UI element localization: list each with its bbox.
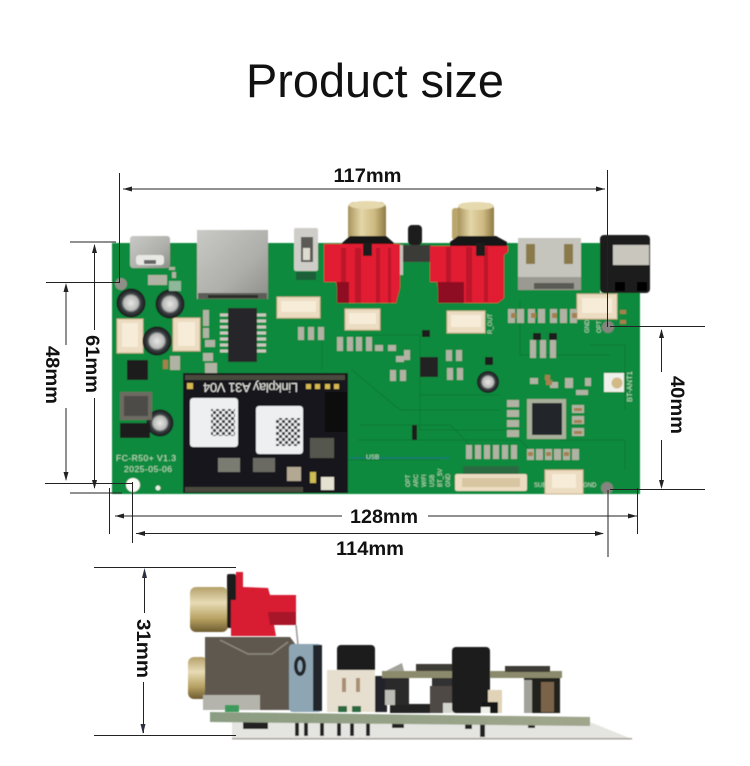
housing fold bbox=[220, 640, 288, 654]
silkscreen pin labels: GND bbox=[583, 483, 597, 489]
black capacitor 2 bbox=[452, 647, 490, 713]
silkscreen pin labels: WIFI bbox=[422, 474, 428, 487]
board traces bbox=[232, 298, 625, 470]
module header pins right bbox=[524, 678, 560, 713]
housing tab bbox=[203, 695, 260, 710]
silkscreen version text: FC-R50+ V1.3 bbox=[116, 453, 176, 463]
HDMI connector bbox=[518, 238, 581, 290]
silkscreen pin labels: USB bbox=[430, 475, 436, 487]
FPC ribbon connector bbox=[455, 466, 527, 491]
silkscreen BT-ANT1: BT-ANT1 bbox=[625, 371, 634, 402]
pins beneath board bbox=[243, 722, 535, 737]
main board edge bbox=[210, 712, 590, 726]
connector inner recesses bbox=[122, 298, 612, 488]
beige connector bbox=[488, 690, 502, 713]
green part on tab bbox=[225, 705, 239, 712]
blue capacitor bbox=[289, 644, 322, 712]
upper RCA gold barrel bbox=[190, 587, 228, 632]
module shield left bbox=[190, 398, 238, 447]
upper RCA shade bbox=[268, 612, 296, 625]
small part under module bbox=[432, 678, 452, 686]
title: Product size bbox=[246, 54, 504, 107]
dark parts beside connector bbox=[375, 676, 387, 712]
lower gold barrel bbox=[188, 657, 208, 699]
parts on module bbox=[386, 663, 550, 672]
label: 40mm: 40mm bbox=[666, 376, 687, 434]
slide switch bbox=[294, 228, 318, 280]
main processor chip bbox=[527, 399, 566, 439]
upper RCA black collar bbox=[227, 574, 236, 628]
low dark strip bbox=[390, 704, 432, 713]
label: 114mm: 114mm bbox=[336, 539, 404, 560]
module parts bbox=[218, 392, 347, 490]
white connector bbox=[327, 670, 375, 712]
silkscreen pin labels: GND bbox=[585, 319, 591, 333]
dark SMD transistors bbox=[412, 330, 557, 440]
module shield right bbox=[256, 406, 303, 454]
silkscreen pin labels bbox=[406, 313, 603, 489]
upper RCA red housing bbox=[231, 572, 296, 636]
label: 31mm: 31mm bbox=[132, 619, 153, 678]
table shadow bbox=[232, 722, 632, 739]
transformer chip bbox=[220, 308, 266, 362]
silkscreen pin labels: R_OUT bbox=[488, 313, 494, 334]
metal lead bbox=[296, 625, 298, 645]
ethernet jack bbox=[197, 230, 268, 299]
label: 128mm: 128mm bbox=[350, 507, 418, 528]
silkscreen pin labels: GND bbox=[446, 473, 452, 487]
height arrowheads bbox=[140, 568, 147, 734]
RCA jack left bbox=[324, 201, 400, 303]
audio board module bbox=[183, 373, 348, 493]
silkscreen USB: USB bbox=[366, 454, 379, 461]
label: 61mm: 61mm bbox=[81, 335, 102, 393]
silkscreen pin labels: OPT bbox=[597, 320, 603, 333]
side view: height dimension bbox=[94, 568, 236, 736]
module header pins left bbox=[385, 678, 409, 705]
antenna connector bbox=[604, 373, 624, 392]
silkscreen pin labels: OPT bbox=[406, 474, 412, 487]
board substrate bbox=[112, 243, 640, 494]
white wire connectors bbox=[117, 294, 617, 494]
silkscreen pin labels: BT_5V bbox=[438, 469, 444, 487]
module label: Linkplay A31 V04 bbox=[203, 380, 298, 395]
electrolytic capacitors bbox=[116, 288, 499, 436]
dimension arrowheads bbox=[64, 186, 664, 536]
brown SMD caps bbox=[163, 310, 626, 456]
optical jack bbox=[600, 235, 650, 293]
inductor block bbox=[430, 686, 472, 713]
side module board bbox=[382, 671, 562, 678]
SMD components bbox=[148, 267, 591, 460]
push button bbox=[400, 225, 431, 275]
module pads bbox=[187, 383, 339, 389]
silkscreen pin labels: ARC bbox=[414, 474, 420, 487]
silkscreen date text: 2025-05-06 bbox=[124, 464, 172, 474]
label: 117mm: 117mm bbox=[334, 166, 402, 187]
metal tab under module bbox=[443, 703, 461, 713]
USB-C connector bbox=[130, 236, 170, 268]
inductors and small chips bbox=[120, 357, 438, 438]
black capacitor 1 bbox=[337, 645, 375, 675]
top view: dimension lines bbox=[45, 170, 705, 557]
RCA jack right bbox=[430, 202, 508, 303]
silkscreen pin labels: SUB bbox=[534, 483, 546, 489]
side view: circuit board profile bbox=[188, 572, 632, 740]
label: 48mm: 48mm bbox=[41, 346, 62, 404]
metal jack housing bbox=[205, 637, 296, 710]
mounting holes bbox=[115, 278, 614, 494]
top view: circuit board bbox=[112, 201, 650, 494]
